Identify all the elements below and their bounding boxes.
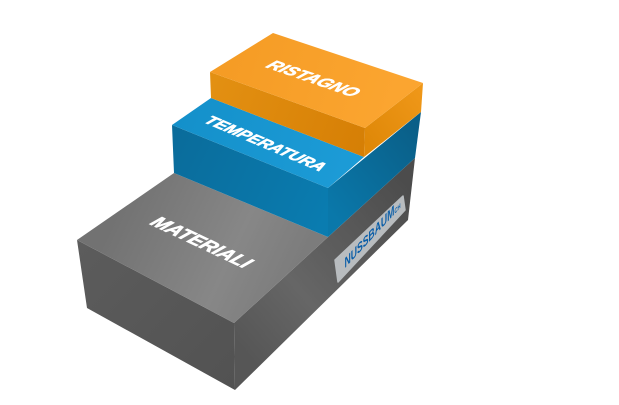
block: ristagno [210, 33, 423, 157]
heading: temperatura: TEMPERATURA [200, 114, 330, 174]
heading: ristagno: RISTAGNO [262, 57, 366, 100]
logo text: NUSSBAUMCH [343, 196, 402, 271]
block: temperatura [172, 98, 421, 237]
logo label [335, 196, 405, 282]
block: materiali [77, 158, 415, 390]
heading: materiali: MATERIALI [145, 214, 258, 272]
